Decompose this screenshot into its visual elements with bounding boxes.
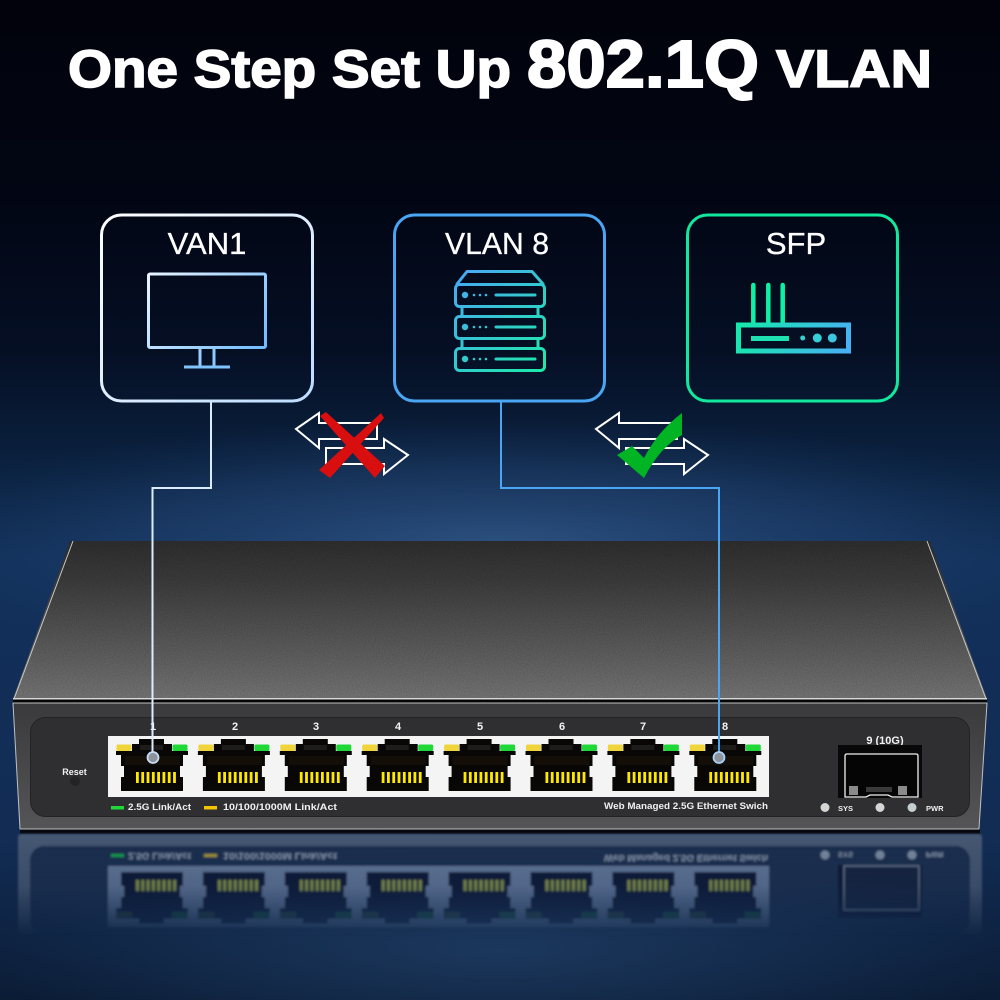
status LEDs: SYS <box>838 804 853 813</box>
switch reflection: 10/100/1000M Link/Act <box>223 851 337 861</box>
card: SFP <box>688 215 898 401</box>
switch reflection: 2.5G Link/Act <box>128 851 191 861</box>
port 4 <box>362 739 434 791</box>
icon: router <box>738 285 848 351</box>
icon: monitor <box>148 274 266 367</box>
card: VAN1 <box>102 215 312 401</box>
card: SFP: SFP <box>766 226 826 261</box>
red cross <box>319 412 385 478</box>
port numbers: 1 <box>150 721 156 733</box>
card: VLAN 8: VLAN 8 <box>445 226 549 261</box>
blocked traffic arrows <box>296 412 408 478</box>
status LEDs: PWR <box>926 804 944 813</box>
port 2 <box>198 739 270 791</box>
icon: server <box>456 272 544 370</box>
port 8 <box>689 739 761 791</box>
port 1 <box>116 739 188 791</box>
title <box>68 27 932 102</box>
port strip <box>108 736 769 797</box>
reset button: Reset <box>62 767 87 777</box>
title: VLAN <box>776 40 932 99</box>
legend: 10/100/1000M: 10/100/1000M Link/Act <box>223 802 337 812</box>
switch reflection <box>18 834 982 934</box>
switch <box>13 541 987 829</box>
allowed traffic arrows <box>596 413 708 478</box>
connector: VAN1 to port 1 <box>148 402 211 763</box>
port numbers: 2 <box>232 721 238 733</box>
port numbers <box>150 721 728 733</box>
card: VLAN 8 <box>394 215 604 401</box>
port 5 <box>444 739 516 791</box>
port numbers: 5 <box>477 721 483 733</box>
title: One Step Set Up <box>68 40 511 99</box>
switch reflection: SYS <box>838 850 853 859</box>
port numbers: 6 <box>559 721 565 733</box>
switch reflection: PWR <box>926 850 944 859</box>
port numbers: 3 <box>313 721 319 733</box>
port numbers: 4 <box>395 721 402 733</box>
port 6 <box>526 739 598 791</box>
switch reflection: Web Managed 2.5G Ethernet Swich <box>604 853 768 863</box>
switch front panel <box>13 698 987 829</box>
SFP port <box>838 735 922 798</box>
port numbers: 7 <box>640 721 646 733</box>
port 7 <box>607 739 679 791</box>
status LEDs <box>820 803 944 813</box>
connector: VLAN 8 to port 8 <box>501 402 724 763</box>
reset button <box>62 767 87 786</box>
legend: 2.5G: 2.5G Link/Act <box>128 802 191 812</box>
card: VAN1: VAN1 <box>168 226 246 261</box>
SFP port: 9 (10G) <box>866 735 904 747</box>
green check <box>617 413 682 478</box>
port numbers: 8 <box>722 721 728 733</box>
port 3 <box>280 739 352 791</box>
switch top surface <box>13 541 987 699</box>
title: 802.1Q <box>527 27 759 102</box>
product name: Web Managed 2.5G Ethernet Swich <box>604 801 768 811</box>
